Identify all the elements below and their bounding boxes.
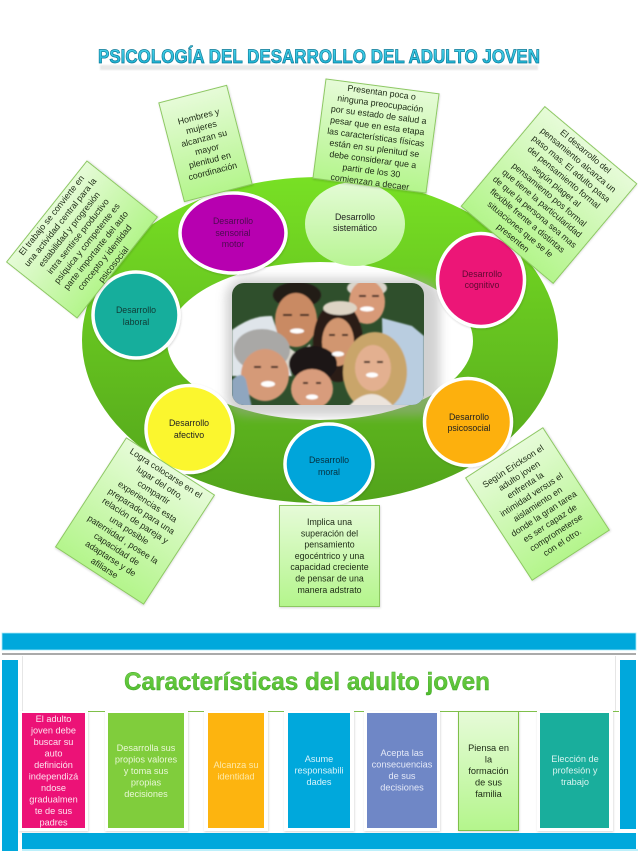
note: psicosocial: donde la gran tarea	[509, 489, 579, 539]
card: profesión: Elección de	[551, 754, 599, 764]
note: afectivo: paternidad , posee la	[86, 513, 160, 566]
card: valores: Desarrolla sus	[117, 743, 176, 753]
note: salud: ninguna preocupación	[337, 93, 424, 114]
note: afectivo: una posible	[108, 514, 151, 547]
note: psicosocial: es ser capaz de	[521, 502, 579, 544]
card: auto definición: definición	[34, 760, 73, 770]
card: valores: propias	[131, 778, 161, 788]
man's shirt	[232, 316, 292, 376]
circle: cognitivo	[438, 234, 524, 326]
circle: sistemático	[305, 182, 405, 266]
title: PSICOLOGÍA DEL DESARROLLO DEL ADULTO JOVEN	[98, 46, 540, 68]
card: auto definición: gradualmen	[29, 794, 78, 804]
note: afectivo: afiliarse	[89, 556, 120, 580]
note: psicosocial: Según Erickson el	[481, 443, 545, 490]
card: auto definición: te de sus	[35, 806, 73, 816]
card: familia: Piensa en	[468, 743, 509, 753]
card: profesión: profesión y	[553, 766, 598, 776]
note: salud: comienzan a decaer	[330, 172, 410, 192]
card: consecuencias: de sus	[388, 771, 416, 781]
note: trabajo: una actividad central para la	[22, 176, 99, 268]
note: psicosocial: adulto joven	[497, 459, 542, 493]
circle: sensorial motor: sensorial	[215, 228, 251, 238]
note: psicosocial: intimidad versus el	[498, 471, 565, 519]
note: trabajo: parte importante del auto	[61, 209, 130, 292]
note: afectivo: adaptarse y de	[84, 538, 138, 579]
circle: laboral: laboral	[123, 317, 149, 327]
family photo	[226, 278, 440, 416]
note: pensamiento: El desarrollo del	[558, 127, 613, 175]
circle: laboral	[93, 272, 179, 358]
note: afectivo: Logra colocarse en el	[128, 446, 204, 500]
note: coordinación: plenitud en	[188, 150, 232, 170]
note: pensamiento: según piaget al	[531, 163, 583, 209]
card: auto definición: auto	[45, 748, 62, 758]
note: trabajo: psíquica y competente es	[52, 201, 122, 286]
card: responsabilidades	[284, 711, 354, 831]
card: familia: formación	[468, 766, 509, 776]
note: trabajo	[7, 161, 157, 318]
note: moral	[280, 506, 380, 606]
note: moral: de pensar de una	[295, 574, 364, 584]
card: valores: propios valores	[115, 754, 178, 764]
card: auto definición: joven debe	[30, 726, 76, 736]
circle: afectivo	[146, 386, 233, 472]
card: familia: de sus	[475, 778, 502, 788]
card: valores: y toma sus	[124, 766, 169, 776]
card: consecuencias: consecuencias	[372, 760, 433, 770]
note: pensamiento: pensamiento alcanza un	[539, 126, 618, 195]
circle: cognitivo: Desarrollo	[462, 269, 502, 279]
note: psicosocial: con el otro.	[541, 526, 583, 558]
note: trabajo: El trabajo se convierte en	[17, 173, 86, 257]
card: identidad: identidad	[217, 772, 255, 782]
circle: afectivo: Desarrollo	[169, 418, 209, 428]
note: coordinación: mayor	[194, 141, 220, 157]
note: coordinación: Hombres y	[177, 106, 221, 127]
card: auto definición: ndose	[41, 783, 66, 793]
card: consecuencias: Acepta las	[381, 748, 424, 758]
panel: características frame	[2, 633, 638, 851]
card: responsabilidades: dades	[306, 777, 332, 787]
note: trabajo: psicosocial	[96, 244, 131, 284]
circle: laboral: Desarrollo	[116, 305, 156, 315]
note: psicosocial: comprometerse	[528, 512, 585, 553]
note: trabajo: estabilidad y progresión	[36, 190, 102, 269]
note: moral: Implica una	[307, 517, 352, 527]
note: pensamiento: flexible frente a distintas	[488, 186, 567, 255]
note: afectivo: experiencias esta	[116, 479, 179, 525]
note: pensamiento: de que la persona sea mas	[491, 174, 579, 250]
note: moral: capacidad creciente	[290, 562, 369, 572]
note: afectivo: relación de pareja y	[100, 495, 171, 546]
note: psicosocial: aislamiento en	[511, 484, 564, 524]
card: profesión: trabajo	[561, 777, 589, 787]
note: pensamiento: presenten	[495, 221, 531, 254]
card: consecuencias: decisiones	[380, 782, 424, 792]
circle: moral	[285, 424, 373, 504]
note: pensamiento: del pensamiento formal	[526, 144, 602, 211]
card: identidad	[204, 711, 268, 831]
card: auto definición	[19, 711, 88, 831]
note: coordinación: mujeres	[185, 118, 218, 136]
heading: características: Características del adulto joven	[124, 668, 490, 696]
note: afectivo: preparado para una	[106, 486, 177, 536]
note: salud: las características físicas	[327, 126, 426, 149]
card: auto definición: padres	[39, 818, 68, 828]
note: salud: por su estado de salud a	[330, 104, 427, 126]
circle: psicosocial: Desarrollo	[449, 412, 489, 422]
note: psicosocial: enfrenta la	[505, 470, 546, 501]
card: profesión	[537, 711, 613, 831]
circle: sistemático: sistemático	[333, 223, 377, 233]
note: afectivo: capacidad de	[92, 531, 142, 568]
circle: sensorial motor: motor	[222, 239, 244, 249]
circle: sensorial motor	[180, 193, 286, 273]
note: moral: superación del	[301, 528, 358, 538]
card: auto definición: independizá	[29, 772, 79, 782]
card: valores	[105, 711, 188, 831]
card: familia: familia	[475, 789, 503, 799]
circle: afectivo: afectivo	[174, 430, 204, 440]
note: moral: pensamiento	[304, 540, 355, 550]
circle: moral: Desarrollo	[309, 455, 349, 465]
note: salud: pesar que en esta etapa	[330, 115, 425, 137]
circle: psicosocial	[424, 378, 512, 466]
circle: cognitivo: cognitivo	[465, 280, 499, 290]
note: trabajo: concepto y identidad	[76, 223, 134, 292]
circle: moral: moral	[318, 467, 340, 477]
card: responsabilidades: Asume	[305, 754, 333, 764]
note: pensamiento: situaciones que se le	[486, 199, 555, 260]
note: pensamiento	[461, 107, 637, 283]
circle: psicosocial: psicosocial	[447, 423, 491, 433]
note: pensamiento: pensamiento pos formal	[510, 161, 589, 229]
note: pensamiento: paso mas. El adulto pasa	[530, 133, 612, 204]
card: valores: decisiones	[124, 789, 168, 799]
note: afectivo: lugar del otro,	[135, 464, 185, 502]
card: auto definición: El adulto	[36, 714, 71, 724]
note: psicosocial	[466, 428, 609, 580]
note: salud: partir de los 30	[342, 162, 401, 180]
note: salud	[313, 79, 439, 194]
circle: sensorial motor: Desarrollo	[213, 216, 253, 226]
card: responsabilidades: responsabili	[294, 766, 344, 776]
card: auto definición: buscar su	[34, 737, 73, 747]
note: coordinación: alcanzan su	[180, 128, 228, 149]
note: pensamiento: que tiene la particularidad	[500, 167, 584, 240]
card: consecuencias	[364, 711, 440, 831]
circle: sistemático: Desarrollo	[335, 212, 375, 222]
note: salud: están en su plenitud se	[329, 138, 420, 159]
note: moral: egocéntrico y una	[295, 551, 364, 561]
note: coordinación: coordinación	[187, 160, 238, 182]
note: coordinación	[159, 85, 252, 202]
card: familia	[458, 712, 518, 830]
grandfather's shirt	[382, 318, 424, 406]
note: afectivo	[56, 438, 214, 604]
note: afectivo: compartir	[136, 478, 172, 506]
note: salud: Presentan poca o	[347, 83, 417, 102]
note: trabajo: intra sentirse productivo	[45, 197, 111, 276]
note: moral: manera adstrato	[297, 585, 362, 595]
note: salud: debe considerar que a	[329, 149, 417, 170]
card: identidad: Alcanza su	[214, 760, 258, 770]
green ring	[82, 177, 558, 503]
card: familia: la	[485, 754, 493, 764]
